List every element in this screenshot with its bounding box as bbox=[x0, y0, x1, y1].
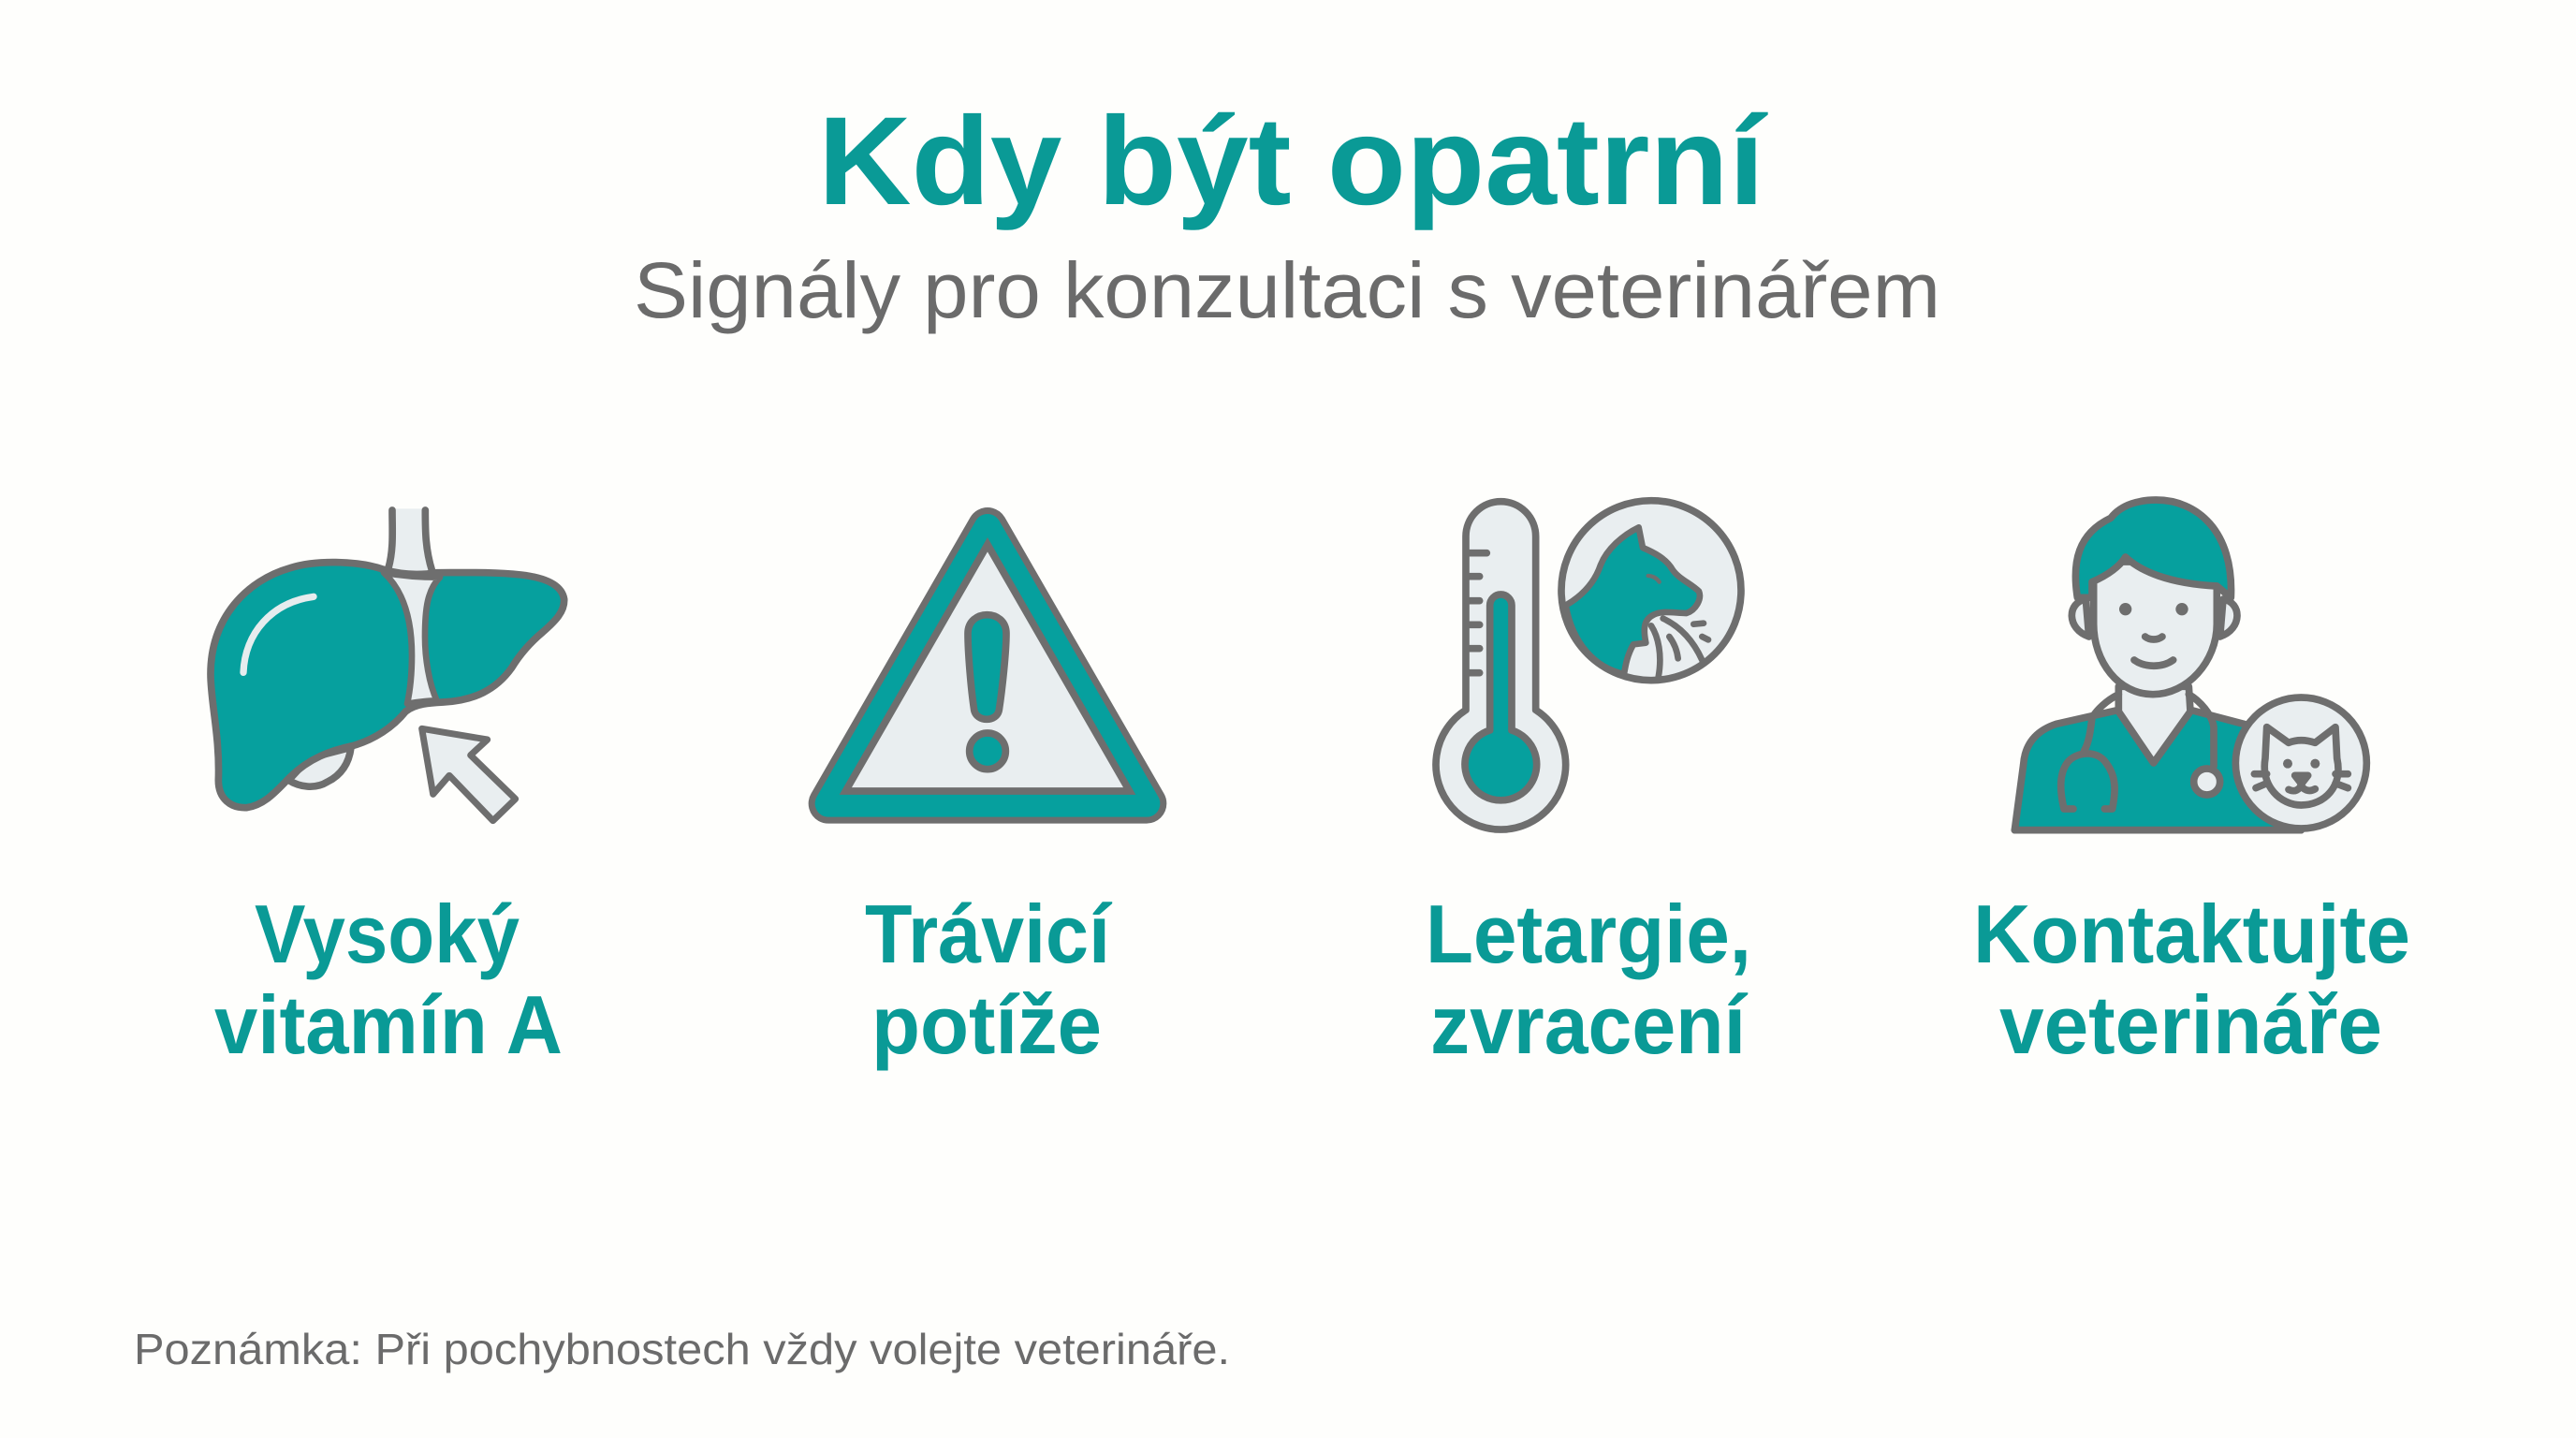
label: digestive trouble: potíže bbox=[871, 978, 1102, 1071]
neck bbox=[2118, 686, 2190, 763]
footnote: Poznámka: Při pochybnostech vždy volejte veterináře. bbox=[134, 1325, 1230, 1373]
dog head bbox=[1566, 527, 1700, 674]
vessel outline bbox=[388, 510, 432, 571]
label: digestive trouble: Trávicí bbox=[865, 888, 1112, 980]
label: contact vet: veterináře bbox=[1999, 978, 2382, 1071]
gap between lobes bbox=[384, 573, 440, 704]
dog circle bbox=[1561, 501, 1741, 681]
cat nose bbox=[2295, 775, 2308, 784]
label: contact vet bbox=[1973, 888, 2410, 1071]
stethoscope disc bbox=[2194, 769, 2220, 795]
label: high vitamin A bbox=[214, 888, 563, 1071]
triangle interior bbox=[845, 545, 1130, 791]
subtitle: Signály pro konzultaci s veterinářem bbox=[634, 246, 1940, 334]
cat right eye bbox=[2310, 759, 2320, 769]
hepatic vessel bbox=[388, 508, 432, 573]
mercury bbox=[1465, 594, 1537, 800]
thermometer body bbox=[1436, 502, 1566, 829]
icon: vet with cat bbox=[2014, 500, 2366, 830]
liver lobes bbox=[211, 563, 564, 808]
cat left eye bbox=[2283, 759, 2292, 769]
label: high vitamin A: vitamín A bbox=[214, 978, 563, 1071]
vomit bbox=[1651, 619, 1708, 677]
cat circle bbox=[2235, 697, 2366, 829]
icon: liver with arrow bbox=[211, 508, 564, 821]
label: lethargy, vomiting: Letargie, bbox=[1426, 888, 1751, 980]
arrow bbox=[422, 728, 516, 821]
highlight bbox=[243, 596, 314, 672]
icon: thermometer and sick dog bbox=[1436, 501, 1741, 829]
label: contact vet: Kontaktujte bbox=[1973, 888, 2410, 980]
exclamation dot bbox=[970, 733, 1005, 770]
ears bbox=[2071, 599, 2237, 637]
nose and mouth bbox=[2134, 637, 2174, 666]
triangle border bbox=[828, 527, 1147, 803]
exclamation mark bbox=[968, 615, 1006, 719]
stethoscope bbox=[2061, 695, 2214, 809]
triangle inner band bbox=[828, 527, 1147, 803]
icon: warning triangle bbox=[828, 527, 1147, 803]
label: high vitamin A: Vysoký bbox=[255, 888, 520, 980]
label: lethargy, vomiting: zvracení bbox=[1430, 978, 1748, 1071]
face bbox=[2094, 562, 2217, 695]
title: Kdy být opatrní bbox=[818, 92, 1768, 231]
thermometer ticks bbox=[1467, 553, 1486, 673]
label: lethargy, vomiting bbox=[1426, 888, 1751, 1071]
hair bbox=[2075, 500, 2232, 597]
gallbladder bbox=[288, 747, 351, 786]
right eye bbox=[2175, 603, 2188, 615]
cat face bbox=[2254, 727, 2348, 805]
label: digestive trouble bbox=[865, 888, 1112, 1071]
scrubs bbox=[2014, 710, 2301, 830]
left eye bbox=[2119, 603, 2131, 615]
dog eye bbox=[1648, 576, 1660, 582]
base line bbox=[2014, 819, 2301, 841]
